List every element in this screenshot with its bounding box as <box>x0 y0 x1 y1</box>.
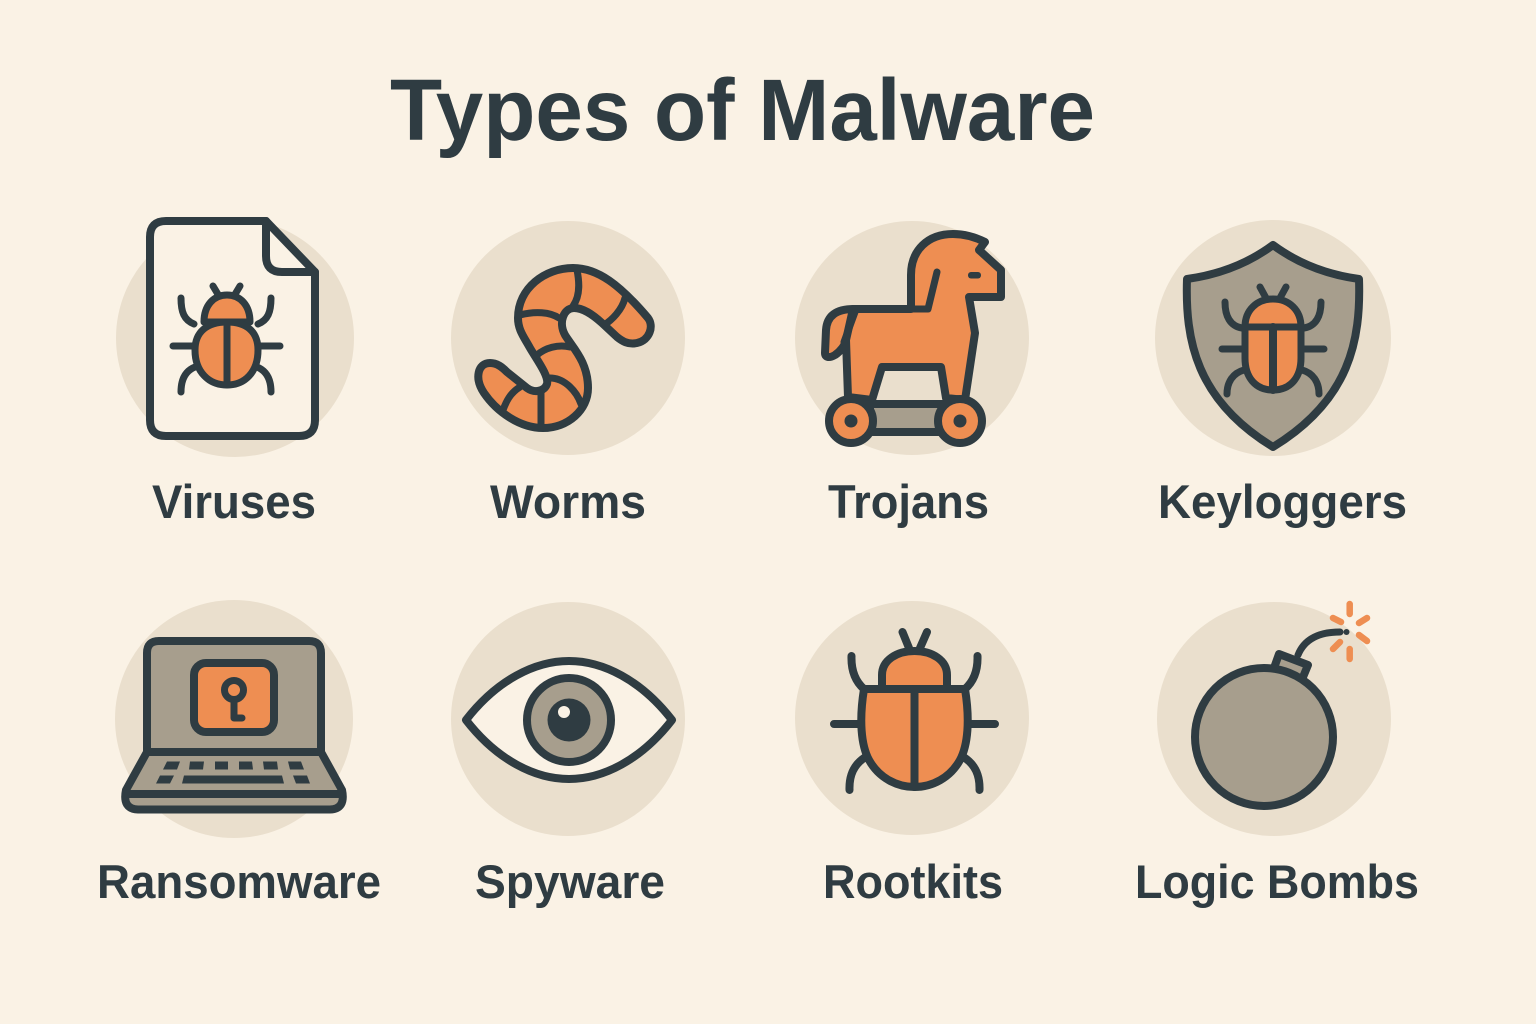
sparks <box>1333 604 1367 659</box>
panel: trojans <box>795 221 1029 528</box>
title: Types of Malware <box>390 62 1095 159</box>
label: Keyloggers <box>1158 475 1407 528</box>
icon: bug on file <box>173 286 280 392</box>
icon: worm <box>478 268 651 428</box>
right wheel <box>938 399 982 443</box>
panel: worms <box>451 221 685 528</box>
label: Rootkits <box>823 855 1003 908</box>
icon: beetle <box>834 632 995 790</box>
icon: locked laptop <box>125 641 343 810</box>
left wheel <box>829 399 873 443</box>
keyboard keys <box>156 762 310 784</box>
panel: ransomware <box>97 600 381 908</box>
panel: spyware <box>451 602 685 908</box>
panel: logic bombs <box>1135 602 1419 908</box>
icon: trojan horse <box>825 234 1001 443</box>
panel: rootkits <box>795 601 1029 908</box>
label: Logic Bombs <box>1135 855 1419 908</box>
label: Viruses <box>152 475 316 528</box>
icon: shield with bug <box>1187 245 1359 447</box>
icon: bomb <box>1195 604 1367 806</box>
label: Trojans <box>828 475 989 528</box>
label: Spyware <box>475 855 665 908</box>
lock badge <box>194 663 274 732</box>
label: Ransomware <box>97 855 381 908</box>
wheeled platform <box>870 404 950 432</box>
icon: eye <box>466 661 672 779</box>
horse eye <box>968 272 981 278</box>
panel: keyloggers <box>1155 220 1407 528</box>
label: Worms <box>490 475 646 528</box>
icon: infected file <box>150 221 315 436</box>
panel: viruses <box>116 219 354 528</box>
